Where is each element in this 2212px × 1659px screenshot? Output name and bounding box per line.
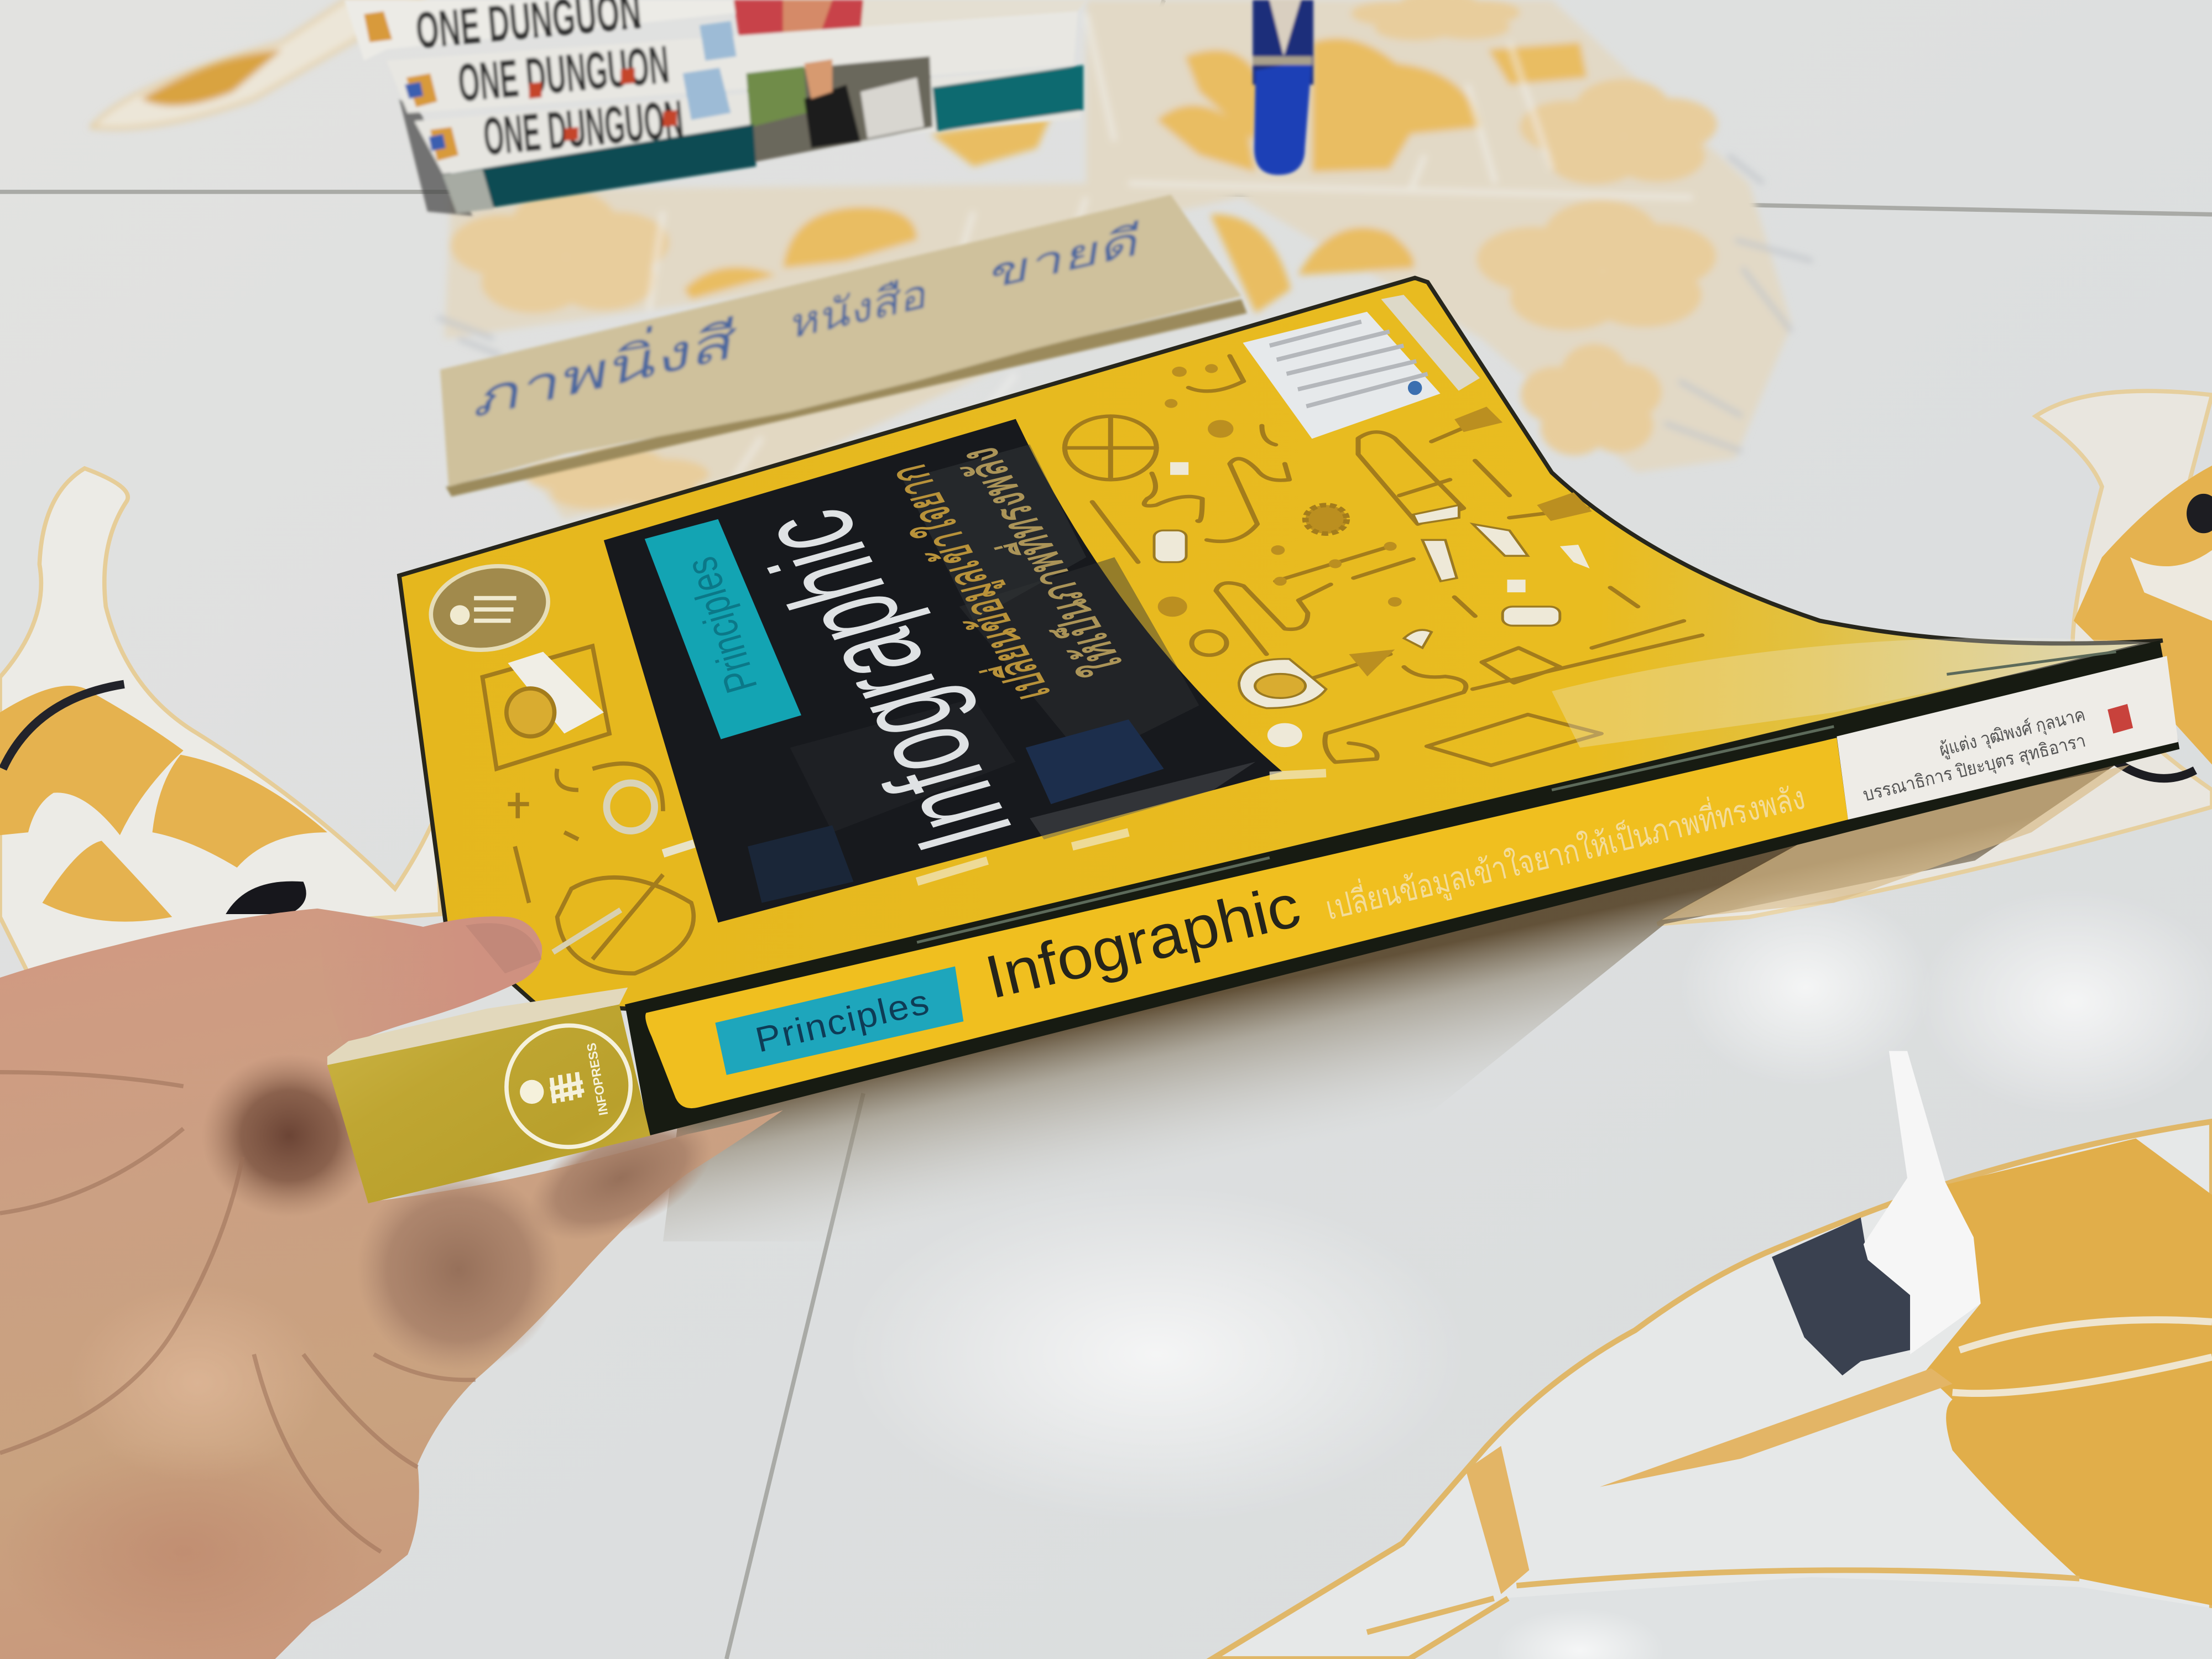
soft glare patches: [1679, 889, 1933, 1086]
gold spine cap: [327, 1004, 650, 1203]
right fish: [1657, 391, 2212, 924]
book 1: [344, 0, 860, 61]
black spine band: [625, 640, 2179, 1136]
handwriting: ขายดี: [979, 218, 1149, 298]
book 2: [387, 11, 1078, 113]
handwriting: ภาพนิ่งสี: [461, 306, 746, 428]
flowers: [451, 0, 1717, 509]
black spot: [1772, 1218, 1910, 1375]
light palm tone: [71, 1284, 325, 1481]
red photo: [734, 0, 863, 48]
bottom lines: [1367, 1570, 2079, 1659]
blue label patches: [683, 21, 737, 120]
radiating white fringe: [437, 155, 1813, 451]
handwriting: หนังสือ: [782, 272, 931, 347]
reddish palm tone: [0, 1439, 367, 1659]
cover thai subtitle line 2: ให้เป็นภาพที่ทรงพลัง: [941, 443, 1136, 681]
reflection of book on floor: [1662, 765, 2130, 920]
white spine end: [1837, 656, 2178, 820]
white lines in orange: [1953, 1320, 2212, 1394]
cover thai subtitle: เปลี่ยนข้อมูลเข้าใจยาก: [870, 460, 1065, 707]
stack of books: ONE DUNGUON: [481, 88, 686, 167]
orange area: [1924, 1139, 2212, 1605]
book 4 teal: [443, 124, 756, 213]
glare on floor: [847, 889, 2212, 1659]
lace background: [445, 0, 1792, 473]
author name: ผู้แต่ง วุฒิพงศ์ กุลนาค: [1937, 705, 2088, 761]
dark crease between thumb and fingers: [202, 1054, 377, 1218]
shrink wrap glare: [1552, 638, 2163, 748]
lower finger shade: [510, 1090, 732, 1266]
cover principles text: Principles: [675, 552, 767, 698]
teal principles block: [645, 519, 801, 739]
floral pattern strip: [437, 0, 1813, 519]
infographic text: Infographic: [979, 872, 1306, 1011]
grey streaks: [903, 445, 1086, 620]
left cover illustrations: [482, 646, 694, 973]
fish body: [0, 468, 440, 973]
book cover: [399, 278, 2163, 1009]
cover infographic title: Infographic: [724, 496, 1042, 864]
shadow under book: [663, 755, 2130, 1241]
finger creases: [0, 1072, 476, 1552]
white highlight icons: [1154, 462, 1590, 747]
logo ring: [494, 1013, 643, 1159]
photo details: [746, 66, 807, 127]
editor name: บรรณาธิการ ปิยะบุตร สุทธิอารา: [1861, 731, 2088, 806]
fish body: [1212, 1121, 2212, 1659]
cardboard sheet: [440, 195, 1241, 487]
faded lower cover icons: [917, 773, 1326, 881]
photo block: [746, 56, 932, 162]
logo dot: [520, 1080, 544, 1104]
filled small icons: [1158, 364, 1592, 676]
fish outline: [1657, 391, 2212, 924]
publisher logo: [494, 1013, 643, 1159]
teal block: [932, 65, 1083, 131]
lace white marks: [649, 14, 1693, 479]
orange patches: [0, 686, 184, 835]
wrap sheen over cover corner: [327, 988, 628, 1065]
left fish pattern: [0, 468, 440, 973]
back note box: [1243, 295, 1480, 439]
red accents: [529, 67, 677, 141]
black marks: [3, 684, 124, 769]
black spots: [2187, 494, 2212, 533]
orange wedge: [1600, 1368, 1953, 1487]
curled fingers shade: [357, 1168, 560, 1371]
book 3: [415, 66, 1081, 174]
publisher badge on cover: [423, 556, 556, 660]
thumb pink: [317, 911, 542, 1047]
logo name: INFOPRESS: [584, 1042, 611, 1117]
yellow spine label: [645, 738, 1848, 1108]
handwriting: [461, 218, 1149, 428]
red publisher mark: [2107, 704, 2133, 734]
orange patch: [2074, 466, 2212, 765]
thumbnail: [466, 923, 542, 973]
orange bar: [1466, 1446, 1529, 1594]
gloss highlights on edge: [917, 652, 2116, 942]
stack shadow: [399, 99, 473, 216]
black title panel: [604, 419, 1282, 922]
cardboard sign: [440, 195, 1247, 497]
top left fish: [92, 0, 423, 128]
teal principles label: [715, 966, 963, 1075]
hand: [0, 909, 783, 1659]
logo bars: [550, 1072, 584, 1103]
colour logo marks: [364, 11, 458, 161]
orange petals: [684, 38, 1587, 313]
cover base: [399, 278, 2163, 1009]
book spine: [327, 640, 2179, 1203]
thai tagline: เปลี่ยนข้อมูลเข้าใจยากให้เป็นภาพที่ทรงพลัง: [1321, 775, 1809, 928]
right cover illustrations: [1065, 356, 1702, 765]
principles text: Principles: [752, 981, 934, 1060]
spine titles: ONE DUNGUON: [456, 34, 672, 113]
blue pen: [1253, 0, 1313, 175]
line icons: [1065, 356, 1702, 765]
stack of books: [344, 0, 1086, 216]
lower floor segment: [1411, 1577, 2212, 1659]
large fish bottom right: [1212, 1121, 2212, 1659]
palm and thumb: [0, 909, 783, 1659]
bright streak: [1864, 1051, 1981, 1354]
cardboard shadow: [446, 299, 1247, 497]
